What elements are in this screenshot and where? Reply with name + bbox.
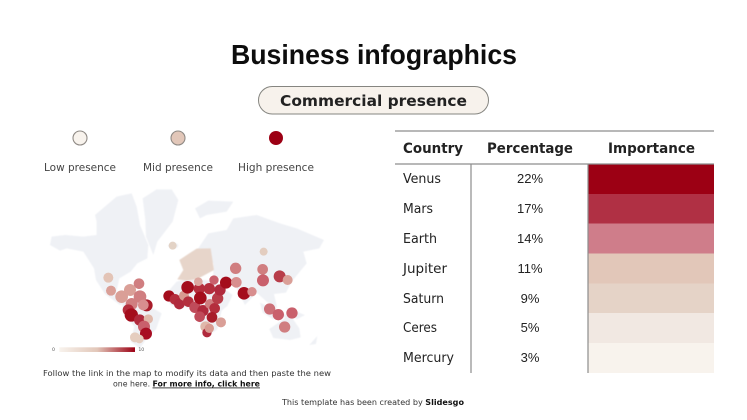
table rows: Ceres (403, 321, 437, 336)
percentages: 17% (517, 201, 543, 216)
table rows: Jupiter (402, 262, 448, 277)
Europe shaded region (177, 248, 214, 281)
table (395, 131, 714, 373)
legend item: mid presence (143, 131, 213, 174)
percentages: 3% (521, 350, 540, 365)
table rows: Venus (403, 172, 441, 187)
legend (44, 131, 314, 174)
table header: Country (403, 141, 463, 157)
title: Business infographics (231, 39, 517, 70)
percentages: 11% (517, 261, 543, 276)
table rows: Earth (403, 232, 437, 247)
subtitle pill: Commercial presence (280, 92, 467, 110)
map note (43, 369, 331, 388)
percentages: 9% (521, 291, 540, 306)
map scale: 10 (138, 347, 144, 353)
legend item: high presence: High presence (238, 162, 314, 174)
percentages (517, 171, 543, 365)
footer credit: This template has been created by Slidesgo (281, 398, 464, 407)
importance bars (588, 164, 714, 373)
table rows: Saturn (403, 292, 444, 307)
legend item: mid presence: Mid presence (143, 162, 213, 174)
table header: Importance (608, 141, 695, 157)
table header (403, 141, 695, 157)
presence dots (103, 242, 298, 343)
subtitle pill (258, 86, 488, 114)
table rows (402, 172, 454, 366)
table rows: Mercury (403, 351, 454, 366)
table header: Percentage (487, 141, 573, 157)
legend item: low presence: Low presence (44, 162, 116, 174)
map scale: 0 (52, 347, 55, 353)
map scale (52, 347, 144, 353)
percentages: 22% (517, 171, 543, 186)
legend item: low presence (44, 131, 116, 174)
map land masses (50, 189, 324, 348)
percentages: 14% (517, 231, 543, 246)
legend item: high presence (238, 131, 314, 174)
map note: Follow the link in the map to modify its data and then paste the new (43, 369, 331, 378)
map note: one here. For more info, click here (113, 380, 261, 388)
world map with presence dots (50, 189, 324, 353)
table rows: Mars (403, 202, 433, 217)
percentages: 5% (521, 320, 540, 335)
